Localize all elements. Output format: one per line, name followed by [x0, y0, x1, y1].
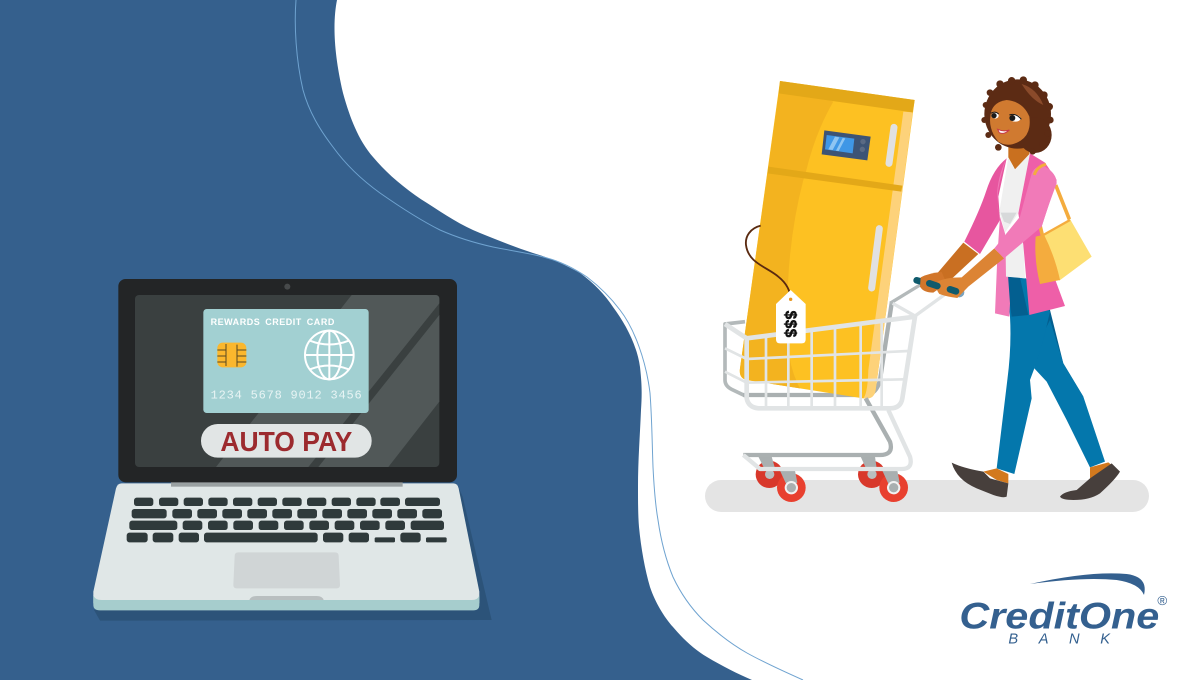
credit card	[203, 309, 369, 413]
background: blue curved panel	[0, 0, 752, 680]
face	[990, 100, 1030, 145]
webcam	[284, 284, 290, 290]
fridge body	[740, 81, 915, 399]
wheels	[756, 457, 908, 502]
fridge top band	[779, 81, 915, 112]
screen glare	[216, 295, 439, 467]
keyboard	[127, 498, 447, 542]
cart handle bar	[917, 280, 964, 297]
jacket	[964, 153, 1065, 317]
price tag: $$$	[781, 311, 798, 338]
shopping cart: front wire basket and wheels	[725, 291, 950, 502]
lower frame front	[743, 410, 911, 469]
fridge handles	[872, 127, 894, 288]
laptop lid notch	[249, 596, 324, 600]
shoes	[952, 462, 1120, 500]
price tag string	[746, 226, 791, 300]
back leg	[1030, 283, 1083, 403]
laptop hinge	[171, 482, 403, 487]
card globe icon	[305, 331, 354, 379]
front leg	[997, 277, 1050, 474]
card number: 1234 5678 9012 3456	[211, 388, 362, 402]
fridge highlight strip	[863, 112, 913, 399]
basket wires	[725, 291, 950, 408]
woman shopper	[917, 76, 1120, 500]
Credit One Bank logo	[959, 573, 1167, 647]
price tag	[776, 290, 806, 343]
trackpad	[233, 552, 340, 588]
logo subtitle: BANK	[1008, 631, 1111, 647]
neck	[1008, 142, 1031, 169]
laptop shadow	[94, 483, 492, 621]
auto pay pill button: AUTO PAY	[220, 426, 352, 457]
fridge door divider	[768, 167, 902, 192]
fridge display panel	[822, 130, 871, 160]
ground shadow	[705, 480, 1149, 512]
laptop front lip	[93, 595, 479, 610]
screen	[135, 295, 439, 467]
laptop	[93, 279, 492, 621]
hair	[981, 76, 1054, 155]
shirt	[999, 153, 1030, 278]
laptop base	[93, 483, 479, 603]
front arm and sleeve	[920, 164, 1057, 298]
fridge shaded side	[740, 83, 833, 388]
eyes	[991, 112, 1021, 122]
logo swoosh	[1030, 573, 1145, 595]
lower frame back	[743, 398, 891, 455]
refrigerator	[740, 81, 915, 399]
handbag	[1035, 185, 1092, 284]
head	[981, 76, 1054, 155]
thin curved accent line	[295, 0, 803, 680]
registered mark: ®	[1157, 593, 1167, 608]
smile	[998, 129, 1009, 133]
back arm	[937, 243, 978, 285]
card title: REWARDS CREDIT CARD	[211, 317, 335, 327]
logo wordmark: CreditOne	[959, 594, 1159, 636]
laptop screen bezel	[118, 279, 457, 482]
card chip	[217, 343, 246, 367]
shopping cart: back parts	[725, 284, 922, 397]
